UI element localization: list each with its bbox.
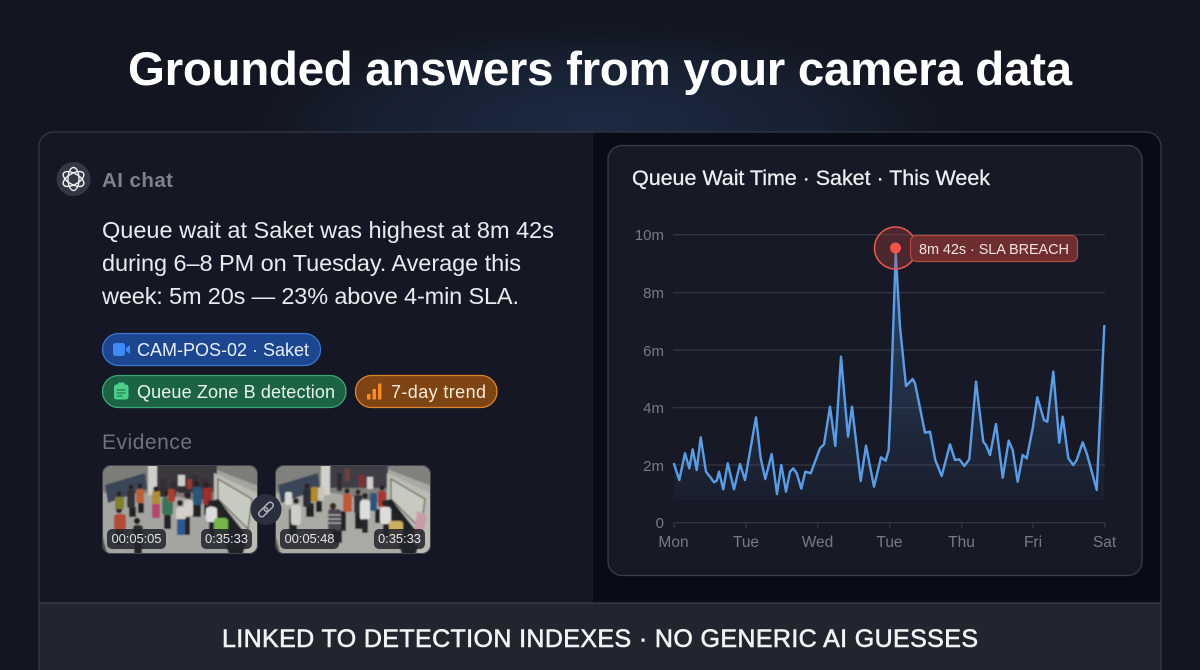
chart title: Queue Wait Time · Saket · This Week <box>632 166 990 190</box>
chat answer text: Queue wait at Saket was highest at 8m 42s <box>102 217 554 243</box>
line chart <box>635 227 1117 551</box>
y axis labels: 2m <box>643 458 664 475</box>
y axis labels: 10m <box>635 227 664 244</box>
y axis labels: 0 <box>656 515 664 532</box>
title: Grounded answers from your camera data <box>128 43 1073 96</box>
pill: detection <box>102 376 346 408</box>
timestamp chips, frame 2: 0:35:33 <box>378 531 421 546</box>
pill: camera source: CAM-POS-02 · Saket <box>137 340 309 360</box>
label: AI chat: AI chat <box>102 169 173 192</box>
grid lines and ticks <box>673 235 1105 528</box>
x axis labels: Wed <box>802 534 833 551</box>
y axis labels: 8m <box>643 285 664 302</box>
x axis labels: Tue <box>876 534 903 551</box>
photo: evidence frame 2 <box>272 462 434 557</box>
timestamp chips, frame 1: 00:05:05 <box>112 531 162 546</box>
timestamp chips, frame 2 <box>280 529 425 549</box>
main panel <box>39 132 1161 670</box>
icon: AI knot <box>56 162 90 196</box>
y axis labels <box>635 227 664 532</box>
y axis labels: 6m <box>643 343 664 360</box>
heading: Evidence: Evidence <box>102 431 192 454</box>
timestamp chips, frame 1: 0:35:33 <box>205 531 248 546</box>
crowd people, frame 2 <box>285 469 403 543</box>
peak marker <box>874 227 916 269</box>
area under line <box>674 253 1104 500</box>
icon: link <box>250 494 282 525</box>
x axis labels: Thu <box>948 534 975 551</box>
x axis labels: Fri <box>1024 534 1042 551</box>
crowd people, frame 1 <box>114 475 228 554</box>
x axis labels <box>658 534 1117 551</box>
panel: chart side <box>593 132 1161 603</box>
pill: camera source <box>102 334 320 366</box>
data line <box>674 253 1104 494</box>
footer text: LINKED TO DETECTION INDEXES · NO GENERIC AI GUESSES <box>222 625 978 653</box>
y axis labels: 4m <box>643 400 664 417</box>
chat answer text <box>101 217 554 309</box>
x axis labels: Mon <box>658 534 689 551</box>
x axis labels: Tue <box>733 534 759 551</box>
chat answer text: during 6–8 PM on Tuesday. Average this <box>102 250 521 276</box>
panel: AI chat <box>56 132 593 554</box>
callout: SLA breach: 8m 42s · SLA BREACH <box>919 242 1069 258</box>
photo: evidence frame 1 <box>99 462 261 557</box>
chat answer text: week: 5m 20s — 23% above 4-min SLA. <box>101 283 519 309</box>
chat header <box>56 162 173 196</box>
callout: SLA breach <box>910 236 1078 262</box>
pill: trend: 7-day trend <box>391 382 486 402</box>
timestamp chips, frame 2: 00:05:48 <box>284 531 334 546</box>
footer banner <box>39 603 1161 670</box>
chart card <box>608 146 1142 576</box>
timestamp chips, frame 1 <box>107 529 252 549</box>
pill: detection: Queue Zone B detection <box>137 382 335 402</box>
x axis labels: Sat <box>1093 534 1117 551</box>
pill: trend <box>356 376 497 408</box>
